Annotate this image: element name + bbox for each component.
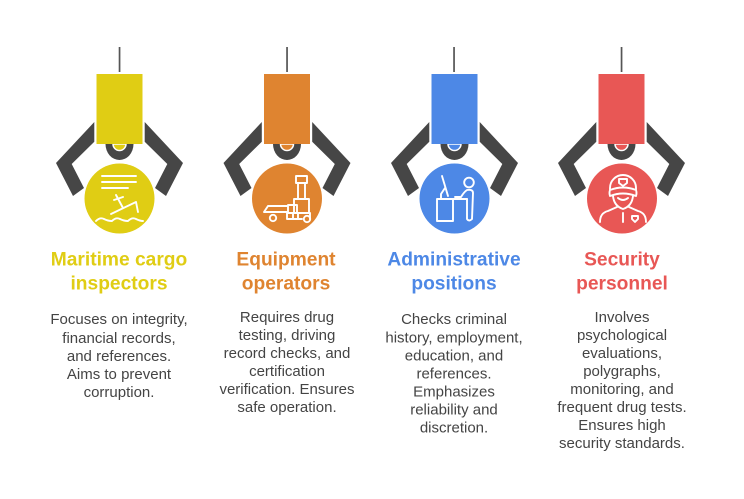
text: administrative: discretion. [420, 420, 488, 436]
text: equipment: testing, driving [239, 327, 335, 344]
text: maritime: Aims to prevent [67, 366, 172, 383]
text: administrative: Checks criminal [401, 311, 507, 328]
text: equipment: safe operation. [237, 399, 337, 416]
panel: security personnel: personnel [576, 274, 668, 294]
panel: equipment operators: operators [242, 274, 330, 294]
text: equipment: verification. Ensures [219, 381, 355, 398]
text: security: frequent drug tests. [557, 399, 687, 416]
text: administrative: Emphasizes [413, 384, 495, 400]
text: security: evaluations, [582, 345, 662, 362]
panel: maritime cargo inspectors [50, 47, 188, 401]
heading: security: Security [584, 250, 660, 270]
panel: equipment operators [219, 47, 355, 416]
icon: pallet truck [252, 164, 322, 234]
panel: security personnel [557, 47, 687, 452]
text: security: psychological [577, 327, 667, 344]
claw: equipment [224, 47, 350, 196]
panel: maritime cargo inspectors: inspectors [70, 274, 168, 294]
heading: equipment: Equipment [236, 250, 336, 270]
icon: security guard [587, 164, 657, 234]
heading: maritime: Maritime cargo [51, 250, 187, 270]
heading: administrative: Administrative [387, 250, 521, 270]
text: security: Ensures high [578, 417, 666, 434]
panel: administrative positions: positions [411, 274, 497, 294]
text: maritime: corruption. [84, 384, 154, 401]
text: maritime: and references. [67, 348, 171, 365]
text: maritime: Focuses on integrity, [50, 311, 188, 328]
icon: sinking ship [84, 164, 154, 234]
text: security [557, 309, 687, 452]
text: equipment: certification [249, 363, 325, 380]
text: administrative: history, employment, [385, 330, 523, 346]
text: security: security standards. [559, 435, 685, 452]
text: maritime: financial records, [62, 330, 176, 347]
text: administrative: references. [416, 366, 492, 382]
panel: administrative positions [385, 47, 523, 436]
text: administrative: education, and [405, 348, 503, 364]
text: security: monitoring, and [570, 381, 674, 398]
text: maritime [50, 311, 188, 401]
claw: administrative [391, 47, 518, 196]
text: equipment: Requires drug [240, 309, 334, 326]
text: administrative: reliability and [410, 402, 498, 418]
icon: person at desk [420, 164, 490, 234]
text: security: polygraphs, [583, 363, 661, 380]
text: equipment [219, 309, 355, 416]
claw: maritime [56, 47, 183, 196]
claw: security [558, 47, 685, 196]
text: security: Involves [594, 309, 650, 326]
text: equipment: record checks, and [224, 345, 350, 362]
text: administrative [385, 311, 523, 436]
